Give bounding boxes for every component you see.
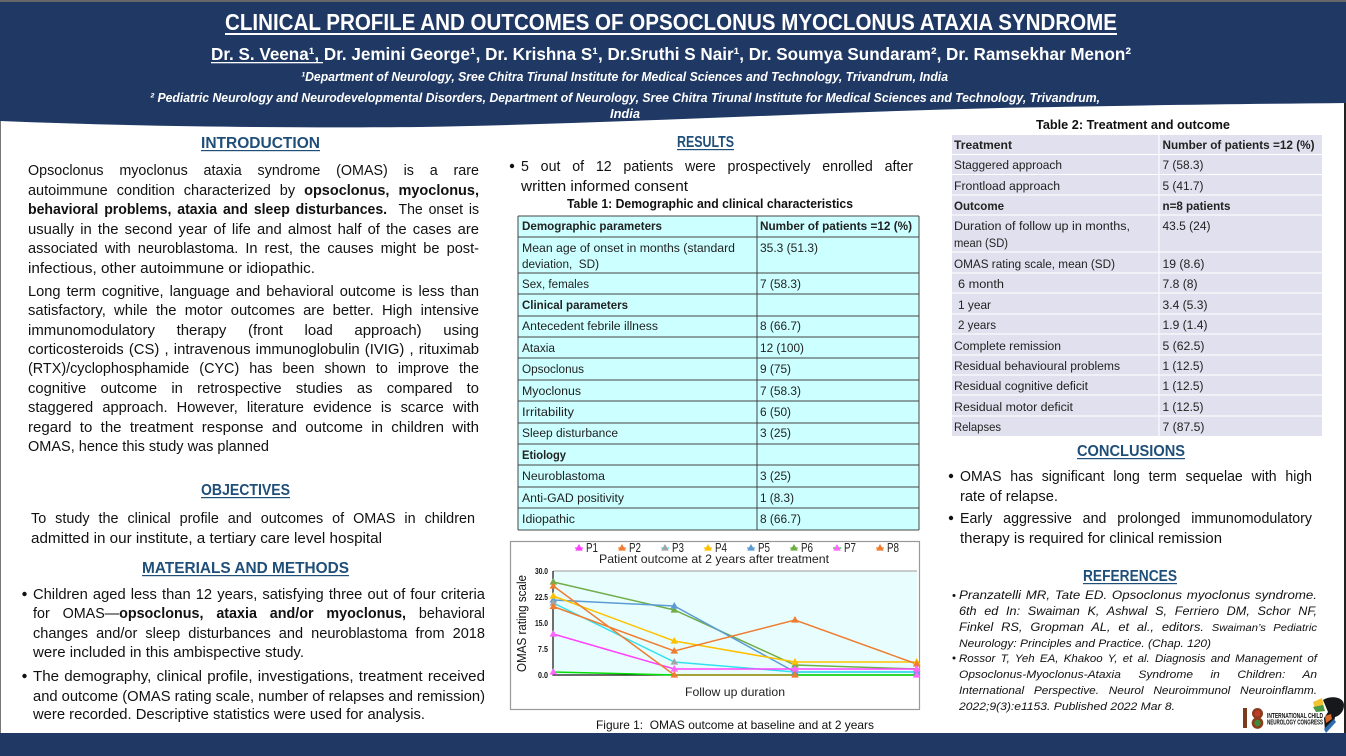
text block: introduction paragraph 2: corticosteroids (CS) , intravenous immunoglobulin (IVIG) , rituximab (28, 342, 479, 358)
table 1: demographic and clinical characteristics: Antecedent febrile illness (522, 319, 658, 333)
table 2: treatment and outcome: Number of patients =12 (%) (1162, 138, 1314, 152)
bullet: inclusion criteria: changes and/or sleep disturbances and neuroblastoma from 2018 (33, 626, 485, 642)
bullet: therapy: therapy is required for clinical remission (960, 531, 1222, 547)
table 2: treatment and outcome: Residual cognitive deficit (954, 379, 1089, 393)
table 1: demographic and clinical characteristics: Myoclonus (522, 384, 581, 398)
reference 1: Finkel RS, Gropman AL, et al., editors. Swaiman’s Pediatric (959, 620, 1318, 634)
header banner (0, 0, 1346, 127)
y axis tick labels: 30.0 (535, 566, 548, 576)
bullet: sequelae (949, 469, 1312, 505)
table 2: treatment and outcome: Treatment (954, 138, 1012, 152)
text block: introduction paragraph 2: immunomodulatory therapy (front load approach) using (28, 323, 479, 339)
affiliation 2: India (610, 107, 640, 121)
y axis tick labels: 15.0 (535, 618, 548, 628)
table 2: treatment and outcome: 5 (41.7) (1162, 179, 1204, 193)
table 1: demographic and clinical characteristics: Clinical parameters (522, 298, 628, 312)
panel: introduction (28, 135, 479, 455)
reference 2: International Perspective. Neurol Neuroimmunol Neuroinflamm. (959, 685, 1317, 697)
bullet: data collected: were recorded. Descriptive statistics were used for analysis. (32, 707, 425, 723)
text block: introduction paragraph 2: Long term cognitive, language and behavioral outcome is less than (28, 284, 479, 300)
chart legend: P6 (801, 540, 813, 555)
table 1: demographic and clinical characteristics: 9 (75) (760, 362, 791, 376)
table 2: treatment and outcome: 7 (58.3) (1162, 158, 1204, 172)
table 2: treatment and outcome: 1 (12.5) (1162, 379, 1204, 393)
table 1: demographic and clinical characteristics: Number of patients =12 (%) (760, 219, 912, 233)
authors: Dr. S. Veena¹, Dr. Jemini George¹, Dr. Krishna S¹, Dr.Sruthi S Nair¹, Dr. Soumya Sundaram², Dr. Ramsekhar Menon² (211, 44, 1131, 64)
bullet: therapy (949, 511, 1313, 547)
panel: table 2 (952, 118, 1322, 436)
icon: congress logo (1243, 697, 1344, 733)
panel: materials and methods (22, 560, 486, 723)
heading: conclusions: CONCLUSIONS (1077, 443, 1185, 460)
table 2: treatment and outcome: 5 (62.5) (1162, 339, 1204, 353)
table 1: demographic and clinical characteristics: Sleep disturbance (522, 426, 618, 440)
table 1: demographic and clinical characteristics: Sex, females (522, 277, 589, 291)
reference 2: 2022;9(3):e1153. Published 2022 Mar 8. (958, 701, 1175, 713)
table 2: treatment and outcome: Relapses (954, 420, 1001, 434)
table 1: demographic and clinical characteristics (518, 216, 919, 530)
text block: objectives (31, 511, 475, 547)
reference 2: Opsoclonus-Myoclonus-Ataxia Syndrome in Children: An (959, 669, 1317, 681)
data series (553, 582, 917, 675)
text block: introduction paragraph 2: OMAS, hence this study was planned (28, 439, 269, 455)
table 2: treatment and outcome: 7 (87.5) (1162, 420, 1204, 434)
table 2: treatment and outcome: 19 (8.6) (1162, 257, 1204, 271)
bullet: therapy: Early aggressive and prolonged immunomodulatory (960, 511, 1313, 527)
chart legend: P2 (629, 540, 641, 555)
line chart: patient outcome at 2 years (510, 540, 920, 710)
table 2: treatment and outcome: Duration of follow up in months, (954, 219, 1130, 233)
table 1: demographic and clinical characteristics: Demographic parameters (522, 219, 662, 233)
table 1: demographic and clinical characteristics: 3 (25) (760, 426, 791, 440)
table 1: demographic and clinical characteristics: 6 (50) (760, 405, 791, 419)
table 2: treatment and outcome: mean (SD) (954, 236, 1008, 250)
chart title: Patient outcome at 2 years after treatment (599, 552, 830, 566)
affiliation 2 (150, 91, 1100, 121)
y axis tick labels: 22.5 (535, 592, 548, 602)
table 1: demographic and clinical characteristics: 35.3 (51.3) (760, 241, 818, 255)
chart legend: P8 (887, 540, 899, 555)
table 1: demographic and clinical characteristics: 12 (100) (760, 341, 804, 355)
bullet: enrolment: written informed consent (520, 179, 688, 195)
reference 2: Rossor T, Yeh EA, Khakoo Y, et al. Diagnosis and Management of (959, 653, 1318, 665)
table 1: demographic and clinical characteristics: Neuroblastoma (522, 469, 605, 483)
table 2: treatment and outcome (952, 135, 1322, 436)
text block: introduction paragraph 2: cognitive outcome in retrospective studies as compared to (28, 381, 479, 397)
chart legend: P5 (758, 540, 770, 555)
reference 1 (952, 588, 1318, 650)
chart legend (575, 540, 899, 555)
panel: results (510, 134, 920, 732)
bullet: enrolment: 5 out of 12 patients were prospectively enrolled after (521, 159, 913, 175)
text block: introduction paragraph 2: regard to the treatment response and outcome in children with (28, 420, 479, 436)
y axis tick labels (535, 566, 548, 680)
icon: congress logo: INTERNATIONAL CHILD (1267, 713, 1323, 720)
text block: introduction paragraph 2 (28, 284, 479, 455)
text block: objectives: To study the clinical profile and outcomes of OMAS in children (31, 511, 475, 527)
table 1: demographic and clinical characteristics: 1 (8.3) (760, 491, 794, 505)
reference 1: Neurology: Principles and Practice. (Chap. 120) (959, 638, 1211, 650)
table 2: treatment and outcome: Residual motor deficit (954, 400, 1074, 414)
heading: results: RESULTS (677, 134, 734, 151)
y axis title: OMAS rating scale (514, 575, 529, 672)
table 2: treatment and outcome: Residual behavioural problems (954, 359, 1120, 373)
heading: objectives: OBJECTIVES (201, 482, 290, 499)
text block: introduction paragraph 1: autoimmune condition characterized by opsoclonus, myoclonus, (28, 183, 479, 199)
table caption: table 2: Table 2: Treatment and outcome (1036, 118, 1230, 132)
table 2: treatment and outcome: 6 month (958, 277, 1004, 291)
text block: introduction paragraph 1 (28, 163, 479, 277)
y axis tick labels: 7.5 (538, 644, 548, 654)
table 1: demographic and clinical characteristics: 8 (66.7) (760, 512, 801, 526)
table 1: demographic and clinical characteristics: Ataxia (522, 341, 555, 355)
panel: objectives (31, 482, 475, 547)
table 2: treatment and outcome: n=8 patients (1162, 199, 1231, 213)
text block: introduction paragraph 2: staggered approach. However, literature evidence is scarce with (28, 400, 479, 416)
affiliation 1: ¹Department of Neurology, Sree Chitra Tirunal Institute for Medical Sciences and Technology, Trivandrum, India (301, 70, 948, 84)
table 1: demographic and clinical characteristics: Mean age of onset in months (standard (522, 241, 735, 255)
table 2: treatment and outcome: Outcome (954, 199, 1004, 213)
table 2: treatment and outcome: 2 years (958, 318, 996, 332)
table 2: treatment and outcome: 1 (12.5) (1162, 400, 1204, 414)
panel: conclusions (949, 443, 1313, 547)
bullet: sequelae: rate of relapse. (960, 489, 1058, 505)
chart legend: P7 (844, 540, 856, 555)
table 2: treatment and outcome: Staggered approach (954, 158, 1062, 172)
table 2: treatment and outcome: 43.5 (24) (1162, 219, 1210, 233)
table 2: treatment and outcome: Complete remission (954, 339, 1061, 353)
chart legend: P3 (672, 540, 684, 555)
table 2: treatment and outcome: 1 (12.5) (1162, 359, 1204, 373)
table 1: demographic and clinical characteristics: Opsoclonus (522, 362, 584, 376)
table 1: demographic and clinical characteristics: 7 (58.3) (760, 384, 801, 398)
figure caption: Figure 1: OMAS outcome at baseline and at 2 years (596, 718, 874, 732)
table 2: treatment and outcome: Frontload approach (954, 179, 1060, 193)
bullet: data collected: and outcome (OMAS rating scale, number of relapses and remission) (33, 689, 485, 705)
bullet: data collected (22, 669, 485, 723)
data markers (550, 578, 920, 678)
table 2: treatment and outcome: OMAS rating scale, mean (SD) (954, 257, 1115, 271)
panel: references (952, 568, 1318, 713)
reference 1: Pranzatelli MR, Tate ED. Opsoclonus myoclonus syndrome. (959, 588, 1317, 602)
table 1: demographic and clinical characteristics: 8 (66.7) (760, 319, 801, 333)
bullet: inclusion criteria (22, 587, 486, 661)
x axis title: Follow up duration (685, 685, 785, 699)
text block: introduction paragraph 1: associated with neuroblastoma. In rest, the causes might be post- (28, 241, 479, 257)
chart legend: P4 (715, 540, 727, 555)
title: CLINICAL PROFILE AND OUTCOMES OF OPSOCLONUS MYOCLONUS ATAXIA SYNDROME (225, 9, 1117, 35)
table 1: demographic and clinical characteristics: deviation, SD) (522, 257, 599, 271)
table 2: treatment and outcome: 1 year (958, 298, 991, 312)
table 1: demographic and clinical characteristics: Irritability (522, 405, 575, 419)
affiliation 2: ² Pediatric Neurology and Neurodevelopmental Disorders, Department of Neurology, Sree Chitra Tirunal Institute for Medical Sciences and Technology, Trivandrum, (150, 91, 1100, 105)
bullet: inclusion criteria: for OMAS—opsoclonus, ataxia and/or myoclonus, behavioral (33, 606, 485, 622)
y axis tick labels: 0.0 (538, 670, 548, 680)
table caption: table 1: Table 1: Demographic and clinical characteristics (567, 197, 853, 211)
table 1: demographic and clinical characteristics: Idiopathic (522, 512, 575, 526)
table 2: treatment and outcome: 7.8 (8) (1162, 277, 1198, 291)
text block: objectives: admitted in our institute, a tertiary care level hospital (31, 531, 382, 547)
bullet: inclusion criteria: Children aged less than 12 years, satisfying three out of four criteria (33, 587, 486, 603)
text block: introduction paragraph 2: satisfactory, while the motor outcomes are better. High intensive (28, 303, 479, 319)
chart legend: P1 (586, 540, 598, 555)
table 2: treatment and outcome: 1.9 (1.4) (1162, 318, 1208, 332)
bullet: inclusion criteria: were included in this ambispective study. (32, 645, 304, 661)
text block: introduction paragraph 1: usually in the second year of life and almost half of the cases are (28, 222, 479, 238)
bullet: sequelae: OMAS has significant long term sequelae with high (960, 469, 1312, 485)
text block: introduction paragraph 1: Opsoclonus myoclonus ataxia syndrome (OMAS) is a rare (28, 163, 479, 179)
bullet: data collected: The demography, clinical profile, investigations, treatment received (33, 669, 485, 685)
table 2: treatment and outcome: 3.4 (5.3) (1162, 298, 1208, 312)
footer band (0, 733, 1346, 756)
heading: introduction: INTRODUCTION (201, 135, 320, 152)
table 1: demographic and clinical characteristics: Anti-GAD positivity (522, 491, 625, 505)
bullet: enrolment (510, 159, 913, 195)
heading: materials and methods: MATERIALS AND METHODS (142, 560, 349, 577)
text block: introduction paragraph 1: behavioral problems, ataxia and sleep disturbances. The onset is (28, 202, 479, 218)
reference 1: 6th ed In: Swaiman K, Ashwal S, Ferriero DM, Schor NF, (959, 604, 1317, 618)
table 1: demographic and clinical characteristics: Etiology (522, 448, 566, 462)
text block: introduction paragraph 2: (RTX)/cyclophosphamide (CYC) has been shown to improve the (28, 361, 479, 377)
text block: introduction paragraph 1: infectious, other autoimmune or idiopathic. (28, 261, 315, 277)
reference 2 (952, 653, 1318, 713)
table 1: demographic and clinical characteristics: 3 (25) (760, 469, 791, 483)
table 1: demographic and clinical characteristics: 7 (58.3) (760, 277, 801, 291)
heading: references: REFERENCES (1083, 568, 1177, 585)
